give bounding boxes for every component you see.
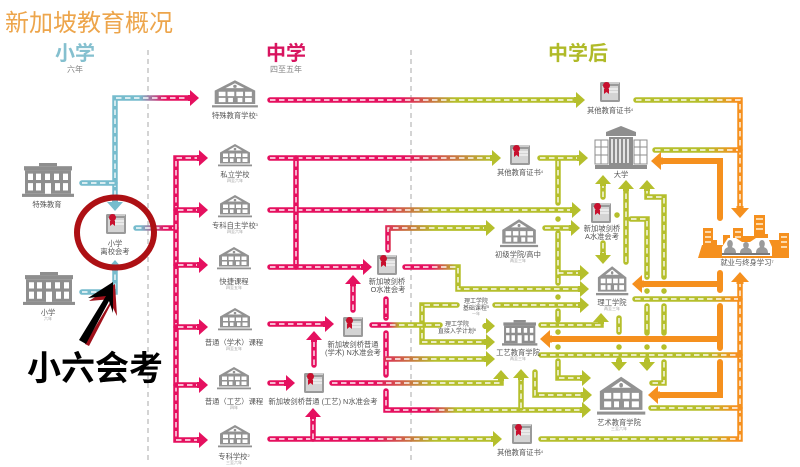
node: O水准会考 xyxy=(369,255,406,294)
label: 理工学院直接入学计划: 6 xyxy=(474,327,477,332)
pipe: y299 xyxy=(635,296,740,302)
node: A水准会考: A水准会考 xyxy=(585,232,619,241)
annotation: black arrow xyxy=(79,282,117,346)
label: 理工学院基础课程: 基础课程 xyxy=(463,306,487,312)
heading: 小学: 六年 xyxy=(67,64,83,74)
node: 专科自主学校: 四至六年 xyxy=(227,228,243,234)
orange arrow: employment to ITE xyxy=(540,306,720,348)
node: O水准会考: 新加坡剑桥 xyxy=(369,277,406,286)
pipes: lower verticals xyxy=(541,291,664,383)
node: 初级学院/高中 xyxy=(495,219,541,263)
node: 小学: 小学 xyxy=(41,308,55,317)
node: 普通（学术）课程 xyxy=(205,308,264,351)
node: 专科自主学校 xyxy=(212,195,259,234)
node: 工艺N水准会考: 新加坡剑桥普通 (工艺) N水准会考 xyxy=(268,397,378,406)
node: 专科自主学校: 3 xyxy=(256,222,259,227)
node: 特殊教育学校: 特殊教育学校 xyxy=(212,111,256,120)
heading: 中学后: 中学后 xyxy=(548,42,608,65)
node: 艺术教育学院: 艺术教育学院 xyxy=(597,418,642,427)
node: 专科自主学校: 专科自主学校 xyxy=(212,221,256,230)
pipe: foundation programme xyxy=(422,305,495,350)
orange arrow: employment to university xyxy=(651,152,720,218)
node: 快捷课程: 快捷课程 xyxy=(219,277,249,286)
node: 普通（工艺）课程: 普通（工艺）课程 xyxy=(205,397,264,406)
pipe: y439 xyxy=(270,431,502,447)
node: 学术N水准会考: 新加坡剑桥普通 xyxy=(327,340,379,349)
node: A水准会考 xyxy=(584,203,621,241)
label: 理工学院直接入学计划: 直接入学计划 xyxy=(438,329,474,335)
pipe: y408 xyxy=(651,405,740,411)
annotation: 小六会考: 小六会考 xyxy=(27,350,163,388)
node: 初级学院/高中: 两至三年 xyxy=(510,257,526,263)
arrows: trunk branches xyxy=(176,202,208,393)
arrow: exam to secondary trunk xyxy=(136,225,176,231)
label: 理工学院基础课程: 5 xyxy=(487,304,490,309)
label: 理工学院基础课程: 一年 xyxy=(472,310,480,316)
node: 其他教育证书 top: 其他教育证书 xyxy=(587,106,631,115)
node: 初级学院/高中: 初级学院/高中 xyxy=(495,250,541,259)
arrow: special education to exam xyxy=(82,183,123,211)
node: 其他教育证书 top xyxy=(587,82,634,115)
node: O水准会考: O水准会考 xyxy=(371,285,405,294)
pipe: y355 xyxy=(541,352,740,358)
pipe: vertical x296 xyxy=(293,158,299,267)
pipe: certificate to employment xyxy=(636,100,749,218)
node: 其他教育证书 middle: 4 xyxy=(541,169,544,174)
node: 就业与终身学习: 7 xyxy=(771,259,774,264)
pipe: O level to junior college xyxy=(388,220,495,250)
node: 大学: 大学 xyxy=(614,170,628,179)
node: 艺术教育学院 xyxy=(597,377,645,431)
node: 工艺教育学院: 两至三年 xyxy=(510,355,526,361)
node: 理工学院 xyxy=(596,266,628,311)
node: 其他教育证书 middle: 其他教育证书 xyxy=(497,168,541,177)
node: A水准会考: 新加坡剑桥 xyxy=(584,224,621,233)
node: 大学 xyxy=(595,126,647,179)
node: 其他教育证书 middle xyxy=(497,145,544,177)
pipe: foundation to polytechnic xyxy=(495,297,589,313)
node: 专科学校: 2 xyxy=(247,453,250,458)
node: 普通（工艺）课程 xyxy=(205,367,264,410)
pipe: y359 xyxy=(386,351,495,367)
arrows: A level and university xyxy=(595,175,664,277)
node: 普通（学术）课程: 普通（学术）课程 xyxy=(205,338,264,347)
pipe: fast course xyxy=(270,259,372,275)
node: 特殊教育: 特殊教育 xyxy=(32,200,62,209)
label: 理工学院直接入学计划: 理工学院 xyxy=(445,320,469,328)
arrows: to N-level normal technical xyxy=(270,275,361,439)
node: 小学: 六年 xyxy=(44,315,52,321)
pipe: y383 xyxy=(332,370,509,383)
node: 专科学校 xyxy=(218,425,252,465)
pipe: y150 to university xyxy=(655,147,740,153)
node: 艺术教育学院: 三至六年 xyxy=(611,425,627,431)
node: 其他教育证书 bottom: 4 xyxy=(541,449,544,454)
node: 小学 xyxy=(23,272,75,321)
pipe: y439 to employment xyxy=(541,272,749,439)
node: 普通（工艺）课程: 四年 xyxy=(230,404,238,410)
node: 工艺教育学院: 工艺教育学院 xyxy=(496,348,541,357)
label: 理工学院基础课程: 理工学院 xyxy=(464,297,488,305)
pipe: y158 xyxy=(270,150,501,166)
node: 私立学校: 私立学校 xyxy=(220,170,250,179)
node: 特殊教育学校: 1 xyxy=(256,112,259,117)
node: 私立学校: 四至六年 xyxy=(227,177,243,183)
node: 理工学院: 理工学院 xyxy=(597,298,627,307)
heading: 小学 xyxy=(55,42,95,74)
orange arrow: employment to arts xyxy=(648,362,720,404)
node: 就业与终身学习: 就业与终身学习 xyxy=(720,258,771,267)
arrow: primary school to exam xyxy=(82,260,123,292)
pipes: x386 segments xyxy=(383,299,389,375)
node: 理工学院: 两至三年 xyxy=(604,305,620,311)
pipe: y100 xyxy=(270,92,585,108)
node: 快捷课程: 四至五年 xyxy=(226,284,242,290)
arrow: to ITE up xyxy=(513,369,529,408)
node: 学术N水准会考: (学术) N水准会考 xyxy=(325,348,381,357)
heading: 中学: 中学 xyxy=(266,42,306,65)
label: 理工学院基础课程 xyxy=(463,297,490,316)
arrow: primary to special school xyxy=(115,90,199,205)
pipe: y210 xyxy=(270,202,581,218)
pipe: direct entry xyxy=(372,322,440,328)
orange arrow: employment to polytechnic xyxy=(632,273,720,293)
heading: 中学: 四至五年 xyxy=(270,64,302,74)
node: 私立学校 xyxy=(218,144,252,183)
label: 理工学院直接入学计划 xyxy=(438,320,477,335)
heading: 小学: 小学 xyxy=(55,42,95,65)
node: 学术N水准会考 xyxy=(325,317,381,357)
node: 专科学校: 专科学校 xyxy=(218,452,247,461)
node: 特殊教育学校 xyxy=(212,80,259,120)
node: 其他教育证书 top: 4 xyxy=(631,107,634,112)
node: 小学离校会考: 小学 xyxy=(108,239,122,248)
node: 专科学校: 三至六年 xyxy=(226,459,242,465)
pipe: x535 to arts xyxy=(535,372,592,403)
pipes: x558 group xyxy=(540,150,591,386)
node: 就业与终身学习 xyxy=(698,215,789,267)
node: 工艺教育学院 xyxy=(496,320,541,361)
annotation: red circle xyxy=(77,198,154,268)
node: 快捷课程 xyxy=(217,247,251,290)
node: 特殊教育 xyxy=(22,163,74,209)
node: 其他教育证书 bottom: 其他教育证书 xyxy=(497,448,541,457)
heading: 中学 xyxy=(266,42,306,74)
node: 小学离校会考: 离校会考 xyxy=(100,247,130,256)
pipe: O level to polytechnic xyxy=(405,267,589,297)
title: 新加坡教育概况 xyxy=(5,10,173,37)
node: 小学离校会考 xyxy=(100,214,130,256)
pipe: secondary trunk xyxy=(176,150,208,448)
node: 其他教育证书 bottom xyxy=(497,424,544,457)
node: 工艺N水准会考 xyxy=(268,373,378,406)
dot: A level xyxy=(614,212,620,218)
pipe: y410 xyxy=(386,391,591,418)
arrow: junior college to A level xyxy=(545,220,580,236)
arrow: direct entry to ITE xyxy=(484,318,495,334)
node: 普通（学术）课程: 四至五年 xyxy=(226,345,242,351)
